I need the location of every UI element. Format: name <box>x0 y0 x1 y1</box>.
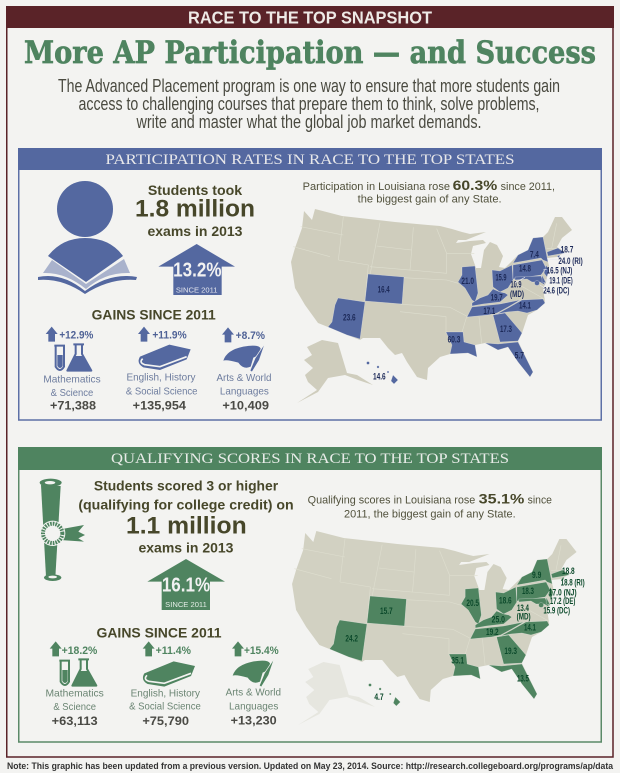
arrow: 13.2 percent: SINCE 2011 <box>176 285 217 294</box>
top banner <box>6 6 614 28</box>
state values: 4.7 <box>374 692 384 702</box>
state values: 9.9 <box>532 570 541 580</box>
map caption: qualifying: 2011, the biggest gain of any State. <box>344 509 516 521</box>
arrow: 16.1 percent: 16.1% <box>162 574 210 597</box>
panel heading: qualifying: QUALIFYING SCORES IN RACE TO THE TOP STATES <box>111 451 509 467</box>
arrow: 13.2 percent <box>158 244 235 295</box>
scores headline: (qualifying for college credit) on <box>78 496 294 512</box>
US base map <box>291 209 572 403</box>
icon: diploma scroll <box>40 479 85 581</box>
scores headline: exams in 2013 <box>138 540 234 556</box>
map caption: qualifying: since <box>528 494 552 506</box>
map caption and state values: 24.6 (DC) <box>543 285 569 295</box>
map caption and state values: 17.1 <box>483 306 495 316</box>
gain: mathematics and science: & Science <box>53 702 96 713</box>
gain: mathematics and science <box>45 641 104 728</box>
map caption: qualifying: 35.1% <box>479 490 525 506</box>
Race to the Top states <box>328 237 565 384</box>
gain: english history social science: +11.9% <box>152 329 187 341</box>
gain: english history social science <box>129 641 201 728</box>
gain: mathematics and science: +18.2% <box>62 645 98 657</box>
gain: english history social science: +75,790 <box>142 714 189 728</box>
map caption and state values: 14.6 <box>373 372 386 382</box>
gain: english history social science: & Social Science <box>129 701 201 712</box>
map caption and state values: 7.4 <box>530 249 539 259</box>
state values: 18.3 <box>522 586 534 596</box>
state values: (MD) <box>517 611 531 621</box>
gain: english history social science: English, History <box>131 689 200 700</box>
map caption and state values: 19.7 <box>491 293 503 303</box>
state values: 24.2 <box>345 634 358 644</box>
gain: arts and world languages: Languages <box>220 386 269 397</box>
state values: 18.8 (RI) <box>561 577 585 587</box>
gain: english history social science: +135,954 <box>133 398 186 412</box>
panel: participation rates <box>18 148 602 420</box>
gain: arts and world languages: Arts & World <box>216 373 271 384</box>
intro text <box>58 75 560 132</box>
Race to the Top states <box>330 559 569 706</box>
state values: 19.2 <box>486 627 499 637</box>
map: qualifying scores by state <box>292 490 585 725</box>
panel heading: participation: PARTICIPATION RATES IN RACE TO THE TOP STATES <box>106 152 514 168</box>
map caption and state values: 5.7 <box>515 350 524 360</box>
US base map and states <box>292 531 577 725</box>
exams headline: Students took <box>148 182 242 198</box>
arrow: 13.2 percent: 13.2% <box>173 259 221 282</box>
gain: arts and world languages: Languages <box>229 701 279 712</box>
top banner: RACE TO THE TOP SNAPSHOT <box>188 8 432 28</box>
gain: arts and world languages: Arts & World <box>226 688 281 699</box>
map caption and state values: 15.9 <box>495 273 506 283</box>
arrow: 16.1 percent <box>147 559 225 610</box>
gain: arts and world languages: +8.7% <box>236 330 265 342</box>
scores headline: 1.1 million <box>126 512 247 539</box>
participation stats column <box>43 182 271 412</box>
gain: mathematics and science: +63,113 <box>52 714 98 728</box>
map caption and state values: 60.3 <box>448 335 460 345</box>
map caption: qualifying: Qualifying scores in Louisiana rose <box>308 494 475 506</box>
gain: mathematics and science: +71,388 <box>50 398 96 412</box>
map caption and state values: Participation in Louisiana rose <box>303 181 450 193</box>
gains heading: GAINS SINCE 2011 <box>96 624 222 640</box>
exams headline: exams in 2013 <box>147 223 243 239</box>
map caption and state values: 10.9 <box>510 279 521 289</box>
icon: student with book <box>38 181 137 294</box>
state values <box>345 566 585 702</box>
panel heading: qualifying <box>18 447 602 470</box>
state values: 25.0 <box>492 614 505 624</box>
qualifying stats column <box>40 478 294 728</box>
gain: mathematics and science: Mathematics <box>43 375 101 386</box>
map caption and state values: (MD) <box>510 289 524 299</box>
gain: english history social science: English, History <box>126 373 196 384</box>
map: participation by state <box>291 177 583 403</box>
state values: 20.5 <box>466 598 479 608</box>
state values: 13.5 <box>517 674 529 684</box>
arrow: 16.1 percent: SINCE 2011 <box>165 600 207 609</box>
gain: mathematics and science: Mathematics <box>45 689 104 700</box>
state values: 17.2 (DE) <box>550 596 575 606</box>
map caption and state values: 19.1 (DE) <box>549 275 573 285</box>
gain: english history social science <box>126 327 197 412</box>
state values: 14.1 <box>524 623 536 633</box>
map caption and state values: 16.4 <box>378 285 390 295</box>
panel: qualifying scores <box>18 447 602 742</box>
map caption and state values: 21.0 <box>461 276 474 286</box>
exams headline <box>135 182 255 239</box>
map caption and state values: 60.3% <box>453 177 498 193</box>
map caption and state values: 14.1 <box>519 300 531 310</box>
gain: mathematics and science <box>43 327 101 412</box>
state values: 19.3 <box>504 646 517 656</box>
map caption and state values <box>303 177 583 382</box>
map caption and state values: 17.3 <box>500 324 512 334</box>
scores headline <box>78 478 294 556</box>
gain: arts and world languages: +10,409 <box>222 398 269 412</box>
gain: arts and world languages <box>216 327 271 412</box>
gain: mathematics and science: & Science <box>51 388 93 399</box>
panel heading: participation <box>18 148 602 170</box>
gain: english history social science: +11.4% <box>156 645 191 657</box>
map caption and state values: 23.6 <box>343 313 356 323</box>
state values: 18.6 <box>499 595 512 605</box>
map caption and state values: 24.0 (RI) <box>558 256 583 266</box>
map caption and state values: 16.5 (NJ) <box>547 265 572 275</box>
map caption and state values: since 2011, <box>501 181 555 193</box>
gains heading: GAINS SINCE 2011 <box>92 306 216 322</box>
map caption and state values: 14.8 <box>519 264 531 274</box>
gain: arts and world languages: +13,230 <box>231 713 277 727</box>
state values: 18.8 <box>562 566 575 576</box>
gain: arts and world languages <box>226 641 281 727</box>
map caption and state values: 18.7 <box>561 245 573 255</box>
gain: english history social science: & Social Science <box>126 386 197 397</box>
gain: arts and world languages: +15.4% <box>244 645 279 657</box>
state values: 35.1 <box>451 655 464 665</box>
scores headline: Students scored 3 or higher <box>94 478 279 494</box>
state values: 17.0 (NJ) <box>549 587 577 597</box>
state values: 15.7 <box>380 606 393 616</box>
state values: 13.4 <box>517 603 529 613</box>
map caption: qualifying <box>308 490 552 521</box>
map caption and state values: the biggest gain of any State. <box>358 194 502 206</box>
exams headline: 1.8 million <box>135 196 255 223</box>
intro text: write and master what the global job market demands. <box>136 111 482 132</box>
gain: mathematics and science: +12.9% <box>59 329 94 341</box>
state values: 15.9 (DC) <box>543 606 570 616</box>
